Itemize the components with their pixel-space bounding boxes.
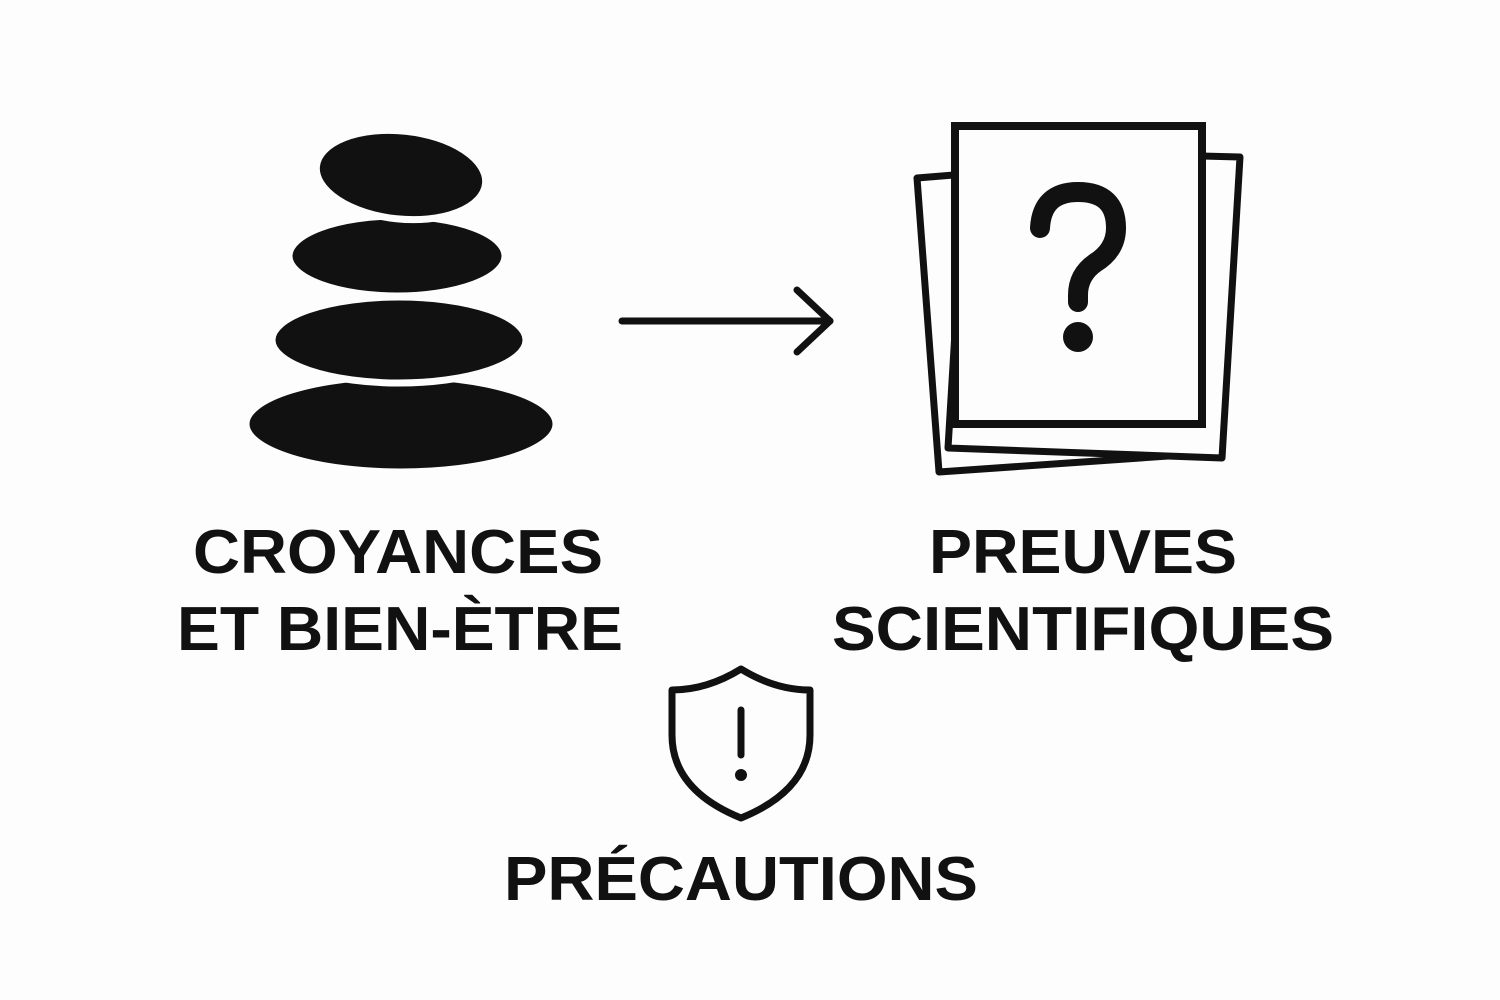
label: preuves scientifiques: SCIENTIFIQUES: [832, 595, 1334, 664]
label: croyances et bien-être: ET BIEN-ÈTRE: [177, 595, 623, 664]
label: croyances et bien-être: CROYANCES: [193, 518, 603, 587]
icon: papers with question mark: [917, 126, 1240, 472]
label: croyances et bien-être: [177, 518, 623, 664]
icon: shield with exclamation: [672, 669, 810, 818]
label: preuves scientifiques: PREUVES: [929, 518, 1237, 587]
label: précautions: PRÉCAUTIONS: [504, 845, 978, 914]
icon: stacked stones: [246, 122, 556, 472]
label: preuves scientifiques: [832, 518, 1334, 664]
arrow: [622, 290, 830, 352]
